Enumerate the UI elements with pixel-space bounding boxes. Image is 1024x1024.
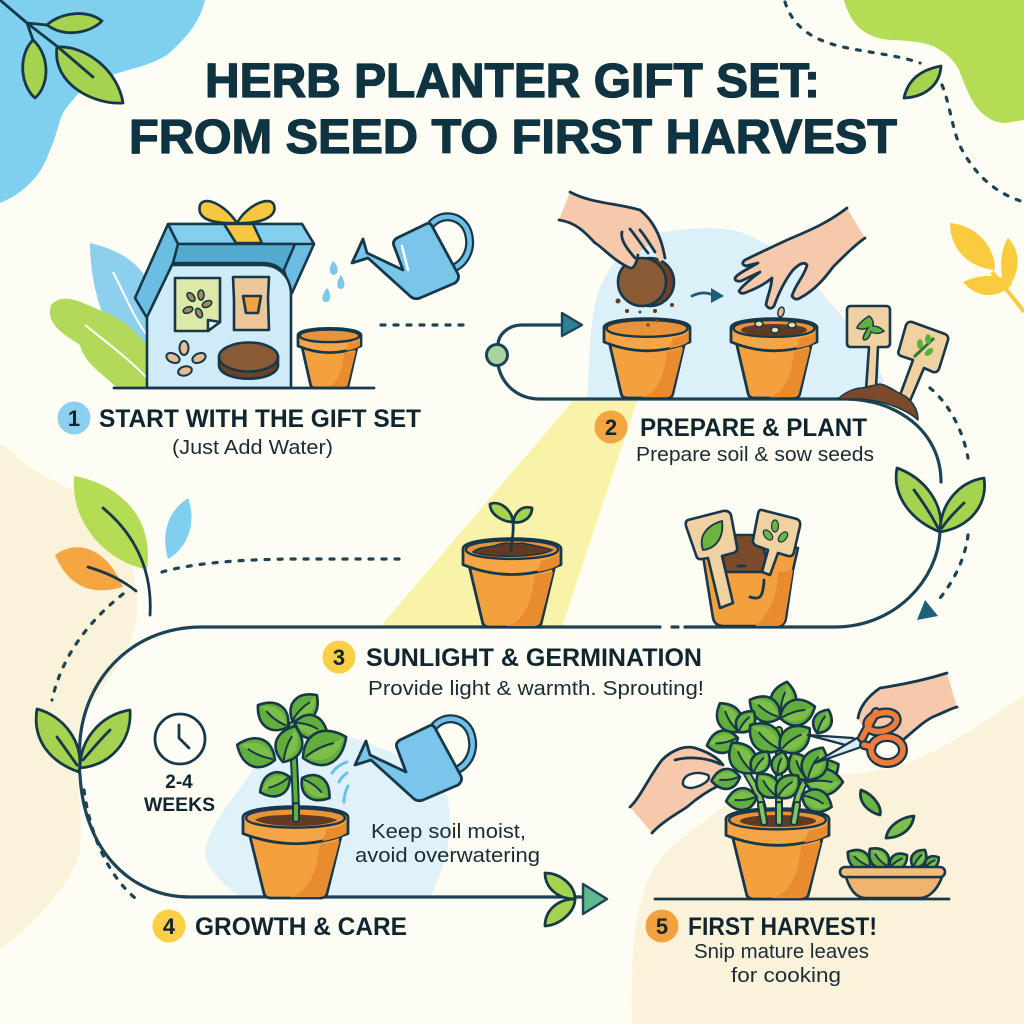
stems [745, 730, 808, 816]
step 1: gift set illustration [50, 201, 374, 388]
clock icon and duration: WEEKS [144, 795, 215, 816]
watering can one [352, 217, 470, 299]
loose seeds [165, 341, 207, 377]
step 5 label: 5 [656, 914, 668, 939]
step 4: growing plant in pot [232, 686, 353, 898]
box lid [135, 224, 314, 318]
seedling [490, 503, 532, 550]
step 1 label: (Just Add Water) [172, 437, 333, 459]
left hand pinching leaf [630, 747, 741, 833]
step 5 label [646, 910, 877, 987]
top-left leaf branch [0, 0, 123, 103]
small arrow between pots [692, 288, 724, 303]
shelf line [655, 898, 949, 900]
pot with soil [604, 319, 690, 398]
step 2 label [594, 410, 874, 466]
hand holding soil disc [559, 192, 674, 314]
ribbon bow [199, 201, 275, 223]
arrow to step 3 [917, 600, 938, 620]
water splash marks [332, 762, 348, 802]
step 1 label [58, 402, 421, 459]
step 3: pot with plant tags [686, 510, 800, 626]
left sprout leaves [36, 709, 130, 772]
box body [147, 265, 291, 388]
dotted lines left [52, 559, 408, 898]
step 2 label: 2 [605, 415, 617, 440]
dotted connector from step 1 [381, 323, 472, 327]
stem [292, 725, 296, 818]
step 3 label: 3 [333, 645, 345, 670]
bowl of leaves [840, 843, 945, 898]
leaves [232, 686, 353, 808]
step 4 label: GROWTH & CARE [195, 913, 407, 941]
falling leaves [860, 790, 914, 838]
watering can two [355, 719, 473, 801]
arrow with leaves to step 5 [545, 873, 607, 926]
plant labels in soil [838, 306, 948, 420]
background leaves [50, 243, 150, 388]
water drops [322, 261, 344, 302]
harvest pot [726, 809, 829, 899]
coir soil disc [219, 342, 278, 379]
step 2: planting illustration [559, 192, 948, 420]
step 5 label: FIRST HARVEST! [688, 913, 877, 941]
top-right leaf [904, 66, 941, 98]
step 2 label: Prepare soil & sow seeds [636, 444, 874, 466]
step 1 label: 1 [68, 406, 80, 431]
clock icon and duration [144, 714, 215, 816]
right sprout leaves [896, 468, 985, 532]
step 3 label [322, 640, 704, 700]
step 3 label: Provide light & warmth. Sprouting! [368, 678, 704, 700]
left decorative leaves [55, 476, 191, 615]
step 2 label: PREPARE & PLANT [640, 414, 867, 442]
step 4 label: 4 [163, 914, 176, 939]
care instruction text: avoid overwatering [355, 845, 540, 867]
harvest herb leaves [704, 679, 845, 817]
main path line [79, 325, 941, 897]
soil bag [233, 277, 269, 330]
step 4 label [152, 910, 407, 942]
care instruction text: Keep soil moist, [371, 821, 526, 843]
arrow to step 2 [562, 313, 582, 336]
small pot [298, 328, 361, 388]
title: HERB PLANTER GIFT SET: [205, 55, 820, 108]
care instruction text [355, 821, 540, 867]
step 5 label: for cooking [731, 965, 841, 987]
step 1 label: START WITH THE GIFT SET [99, 405, 421, 433]
shelf line [114, 387, 374, 389]
right hand with scissors [808, 673, 957, 763]
seed packet card [175, 278, 220, 331]
hand sowing seeds [735, 208, 865, 308]
step 5 label: Snip mature leaves [694, 941, 869, 963]
step 3: sprouting pot [463, 503, 561, 627]
title: FROM SEED TO FIRST HARVEST [129, 111, 897, 164]
path node [486, 344, 508, 366]
clock icon and duration: 2-4 [165, 772, 193, 793]
step 3 label: SUNLIGHT & GERMINATION [366, 644, 702, 672]
step 5: harvest illustration [630, 673, 957, 899]
title [129, 55, 897, 164]
yellow sprig [950, 223, 1024, 312]
dotted flourish top right [785, 2, 1024, 202]
pot with seeds [731, 306, 817, 398]
dotted curve right [930, 388, 968, 604]
